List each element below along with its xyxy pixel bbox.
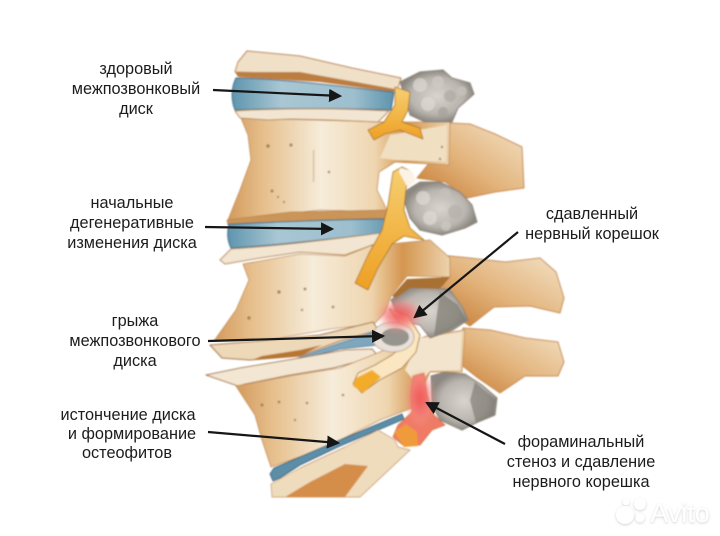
label: early degenerative changes: дегенеративные	[70, 214, 194, 232]
body pores 3	[260, 394, 344, 421]
vertebra body 2	[214, 240, 450, 341]
lower endplate 1	[235, 109, 389, 122]
label: compressed nerve root: сдавленный	[546, 205, 638, 223]
narrowed disc with osteophytes	[270, 414, 404, 481]
nerve root 1	[368, 87, 423, 140]
label: disc thinning and osteophytes: истончение диска	[60, 406, 196, 424]
herniation outer capsule	[372, 322, 414, 352]
watermark icon	[616, 498, 646, 524]
inflammation glow: herniation	[376, 298, 424, 332]
facet joint 3	[391, 285, 468, 338]
arrow: osteophytes	[208, 432, 338, 443]
label: disc herniation: грыжа	[112, 312, 159, 330]
top vertebra cap	[235, 51, 401, 91]
herniated disc upper endplate	[210, 322, 378, 360]
vertebra 2 lamina arch	[392, 277, 450, 298]
vertebra 3 pedicle highlight	[405, 332, 462, 385]
compressed nerve root 4	[393, 373, 445, 446]
label: foraminal stenosis: нервного корешка	[512, 473, 650, 491]
nerve root 2	[355, 167, 424, 290]
label: compressed nerve root: нервный корешок	[525, 225, 660, 243]
label: healthy disc: межпозвонковый	[72, 80, 200, 98]
upper endplate 2	[227, 210, 392, 225]
vertebra body 1	[228, 118, 450, 220]
bottom vertebra	[271, 430, 410, 497]
arrow: hernia	[208, 336, 383, 341]
spine illustration	[206, 51, 564, 497]
pedicle highlight 1	[380, 125, 447, 162]
label: foraminal stenosis: фораминальный	[518, 433, 644, 451]
herniated disc sliver	[298, 332, 378, 358]
arrow: foraminal stenosis	[427, 403, 505, 444]
facet joint 2	[404, 182, 477, 235]
label: disc thinning and osteophytes: остеофитов	[82, 444, 172, 462]
body pores 2	[247, 288, 334, 320]
vertebra body 3	[236, 330, 465, 467]
inflammation glow: foraminal stenosis	[405, 370, 435, 426]
herniation core	[381, 328, 409, 346]
label: disc thinning and osteophytes: и формирование	[68, 425, 196, 443]
label: early degenerative changes: начальные	[91, 194, 173, 212]
watermark: Avito	[616, 498, 710, 528]
body pores 1	[266, 143, 443, 203]
healthy disc	[232, 78, 394, 110]
facet joint 1	[400, 70, 474, 122]
label: disc herniation: межпозвонкового	[69, 332, 201, 350]
watermark text: Avito	[650, 498, 710, 528]
label: disc herniation: диска	[113, 352, 158, 370]
label: healthy disc: диск	[119, 100, 154, 118]
nerve root 3	[353, 309, 420, 393]
spinous process 2	[440, 255, 564, 326]
label: foraminal stenosis: стеноз и сдавление	[507, 453, 655, 471]
lower endplate 3	[206, 349, 378, 386]
early degenerated disc	[228, 219, 392, 248]
spinous process 1	[417, 123, 524, 198]
spinous process 3	[455, 328, 564, 393]
herniation bulge	[372, 322, 414, 352]
label: healthy disc: здоровый	[99, 60, 173, 78]
arrow: early degeneration	[205, 227, 332, 229]
facet joint 4	[431, 372, 497, 430]
lower endplate 2	[220, 232, 390, 264]
arrow: healthy disc	[213, 90, 340, 96]
label: early degenerative changes: изменения диска	[67, 234, 198, 252]
arrow: compressed nerve root	[415, 232, 518, 317]
